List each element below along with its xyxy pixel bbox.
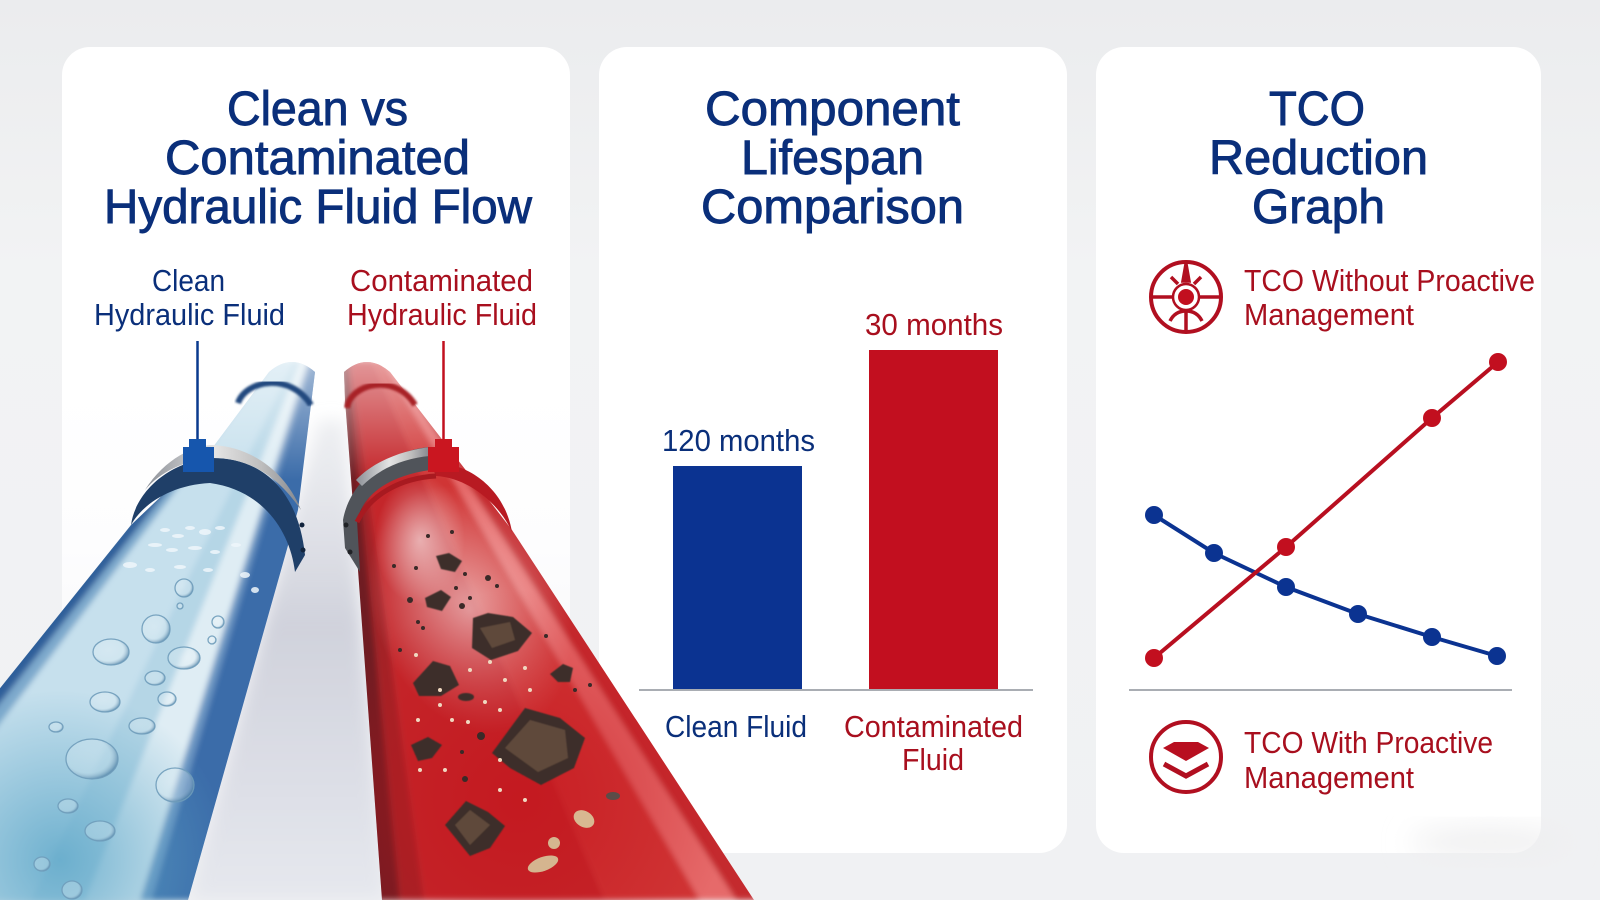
line chart axis [1129,689,1512,691]
series: with proactive management [1145,506,1506,665]
leader line and connector: contaminated fluid [428,341,459,472]
panel: component lifespan [599,47,1067,853]
label: contaminated hydraulic fluid [347,263,537,332]
pipe illustration: red contaminated pipe [343,362,754,900]
heading: panel 2 title: Lifespan [741,132,924,185]
bar: contaminated fluid [869,350,998,690]
legend text: TCO with proactive management: TCO With Proactive [1244,725,1493,760]
legend text: TCO without proactive management: Management [1244,297,1414,332]
heading: panel 1 title [104,83,532,234]
leader line and connector: clean fluid [183,341,214,472]
value: 120 months: 120 months [662,423,815,458]
froth at pipe entrance [123,526,259,593]
axis label: contaminated fluid [844,709,1023,777]
tan particles and specks [392,530,620,876]
legend text: TCO without proactive management: TCO Without Proactive [1244,263,1535,298]
label: clean hydraulic fluid: Clean [152,263,225,298]
value: 30 months: 30 months [865,307,1003,342]
icon: TCO without proactive management [1151,262,1221,332]
line chart: TCO reduction [1129,353,1512,690]
label: clean hydraulic fluid: Hydraulic Fluid [94,297,285,332]
label: contaminated hydraulic fluid: Hydraulic Fluid [347,297,537,332]
heading: panel 3 title: Graph [1252,181,1385,234]
label: contaminated hydraulic fluid: Contaminated [350,263,533,298]
panel smudge: lower right shadow [1410,828,1570,856]
heading: panel 2 title [701,83,964,234]
panel: TCO reduction [1096,47,1541,853]
panel: clean vs contaminated flow [62,47,570,853]
pipe illustration: blue clean fluid pipe [0,355,345,900]
axis label: clean fluid: Clean Fluid [665,709,807,744]
legend text: TCO with proactive management: Management [1244,760,1414,795]
heading: panel 1 title: Hydraulic Fluid Flow [104,181,532,234]
axis label: contaminated fluid: Contaminated [844,709,1023,744]
bar: clean fluid [673,466,802,690]
heading: panel 3 title: TCO [1269,83,1365,136]
heading: panel 1 title: Contaminated [165,132,470,185]
chart baseline [639,689,1033,691]
pipe shadow on backdrop [190,420,385,900]
distant clamp, red pipe [347,385,415,408]
label: clean hydraulic fluid [94,263,285,332]
heading: panel 3 title [1209,83,1428,234]
bar chart: component lifespan [639,307,1033,777]
water droplets [34,579,224,899]
heading: panel 2 title: Comparison [701,181,964,234]
main clamp, red pipe [343,447,512,572]
main clamp, blue pipe [131,445,306,572]
debris rocks [411,553,585,856]
distant clamp, blue pipe [238,383,311,405]
legend text: TCO with proactive management [1244,725,1493,795]
legend text: TCO without proactive management [1244,263,1535,332]
icon: TCO with proactive management [1151,722,1221,792]
series: without proactive management [1145,353,1507,667]
heading: panel 2 title: Component [705,83,960,136]
heading: panel 1 title: Clean vs [227,83,408,136]
axis label: contaminated fluid: Fluid [902,742,964,777]
heading: panel 3 title: Reduction [1209,132,1428,185]
